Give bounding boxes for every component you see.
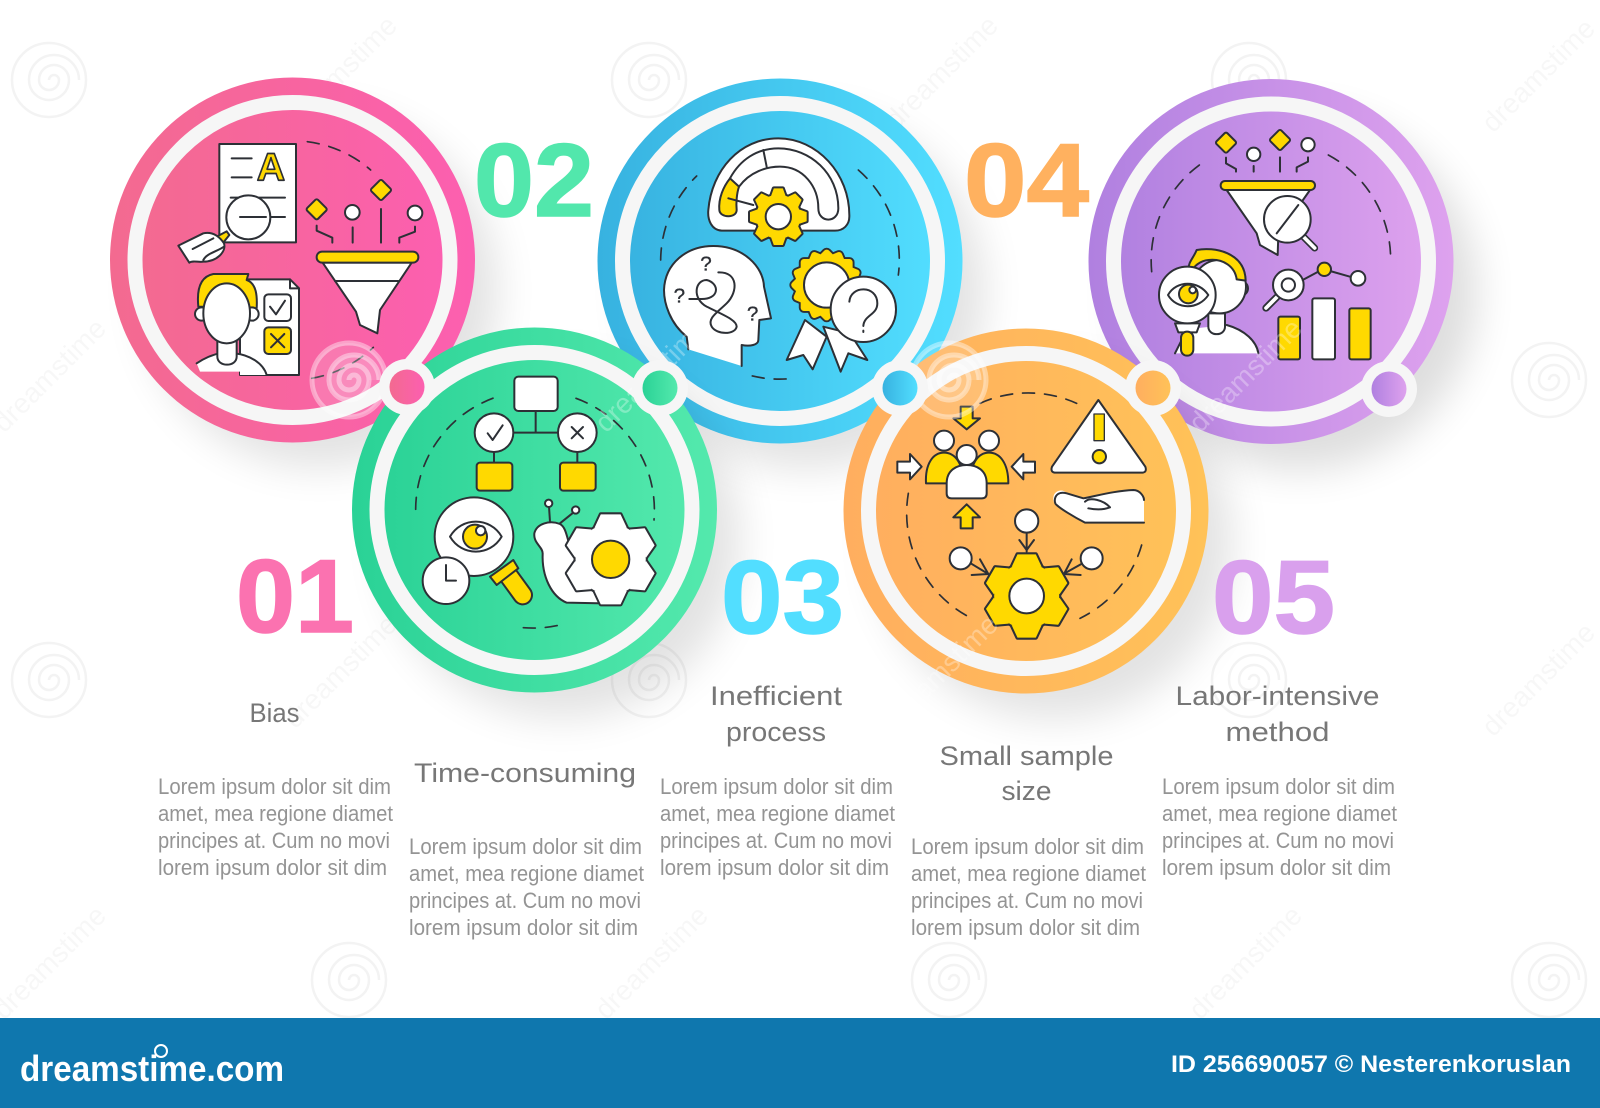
panel: circle 2 green	[352, 328, 740, 718]
text block 5: lorem ipsum dolor sit dim	[1162, 855, 1391, 880]
text block 4: lorem ipsum dolor sit dim	[911, 915, 1140, 940]
text block 3: lorem ipsum dolor sit dim	[660, 855, 889, 880]
icon: gauge, confused head and badge	[661, 138, 899, 379]
text block 4: amet, mea regione diamet	[911, 861, 1146, 886]
text block 3: principes at. Cum no movi	[660, 828, 892, 853]
watermark: diagonal text on circles	[589, 313, 1308, 734]
footer logo: dreamstime.com	[20, 1048, 284, 1089]
number 02: 02	[474, 123, 594, 239]
watermark: diagonal text on circles: dreamstime	[879, 609, 1004, 734]
connector dot 1	[379, 359, 435, 415]
text block 2: amet, mea regione diamet	[409, 861, 644, 886]
text block 4: principes at. Cum no movi	[911, 888, 1143, 913]
heading: Bias: Bias	[250, 698, 300, 728]
text block 5: amet, mea regione diamet	[1162, 801, 1397, 826]
connector dot 5	[1361, 361, 1417, 417]
text block 5: principes at. Cum no movi	[1162, 828, 1394, 853]
text block 1: principes at. Cum no movi	[158, 828, 390, 853]
watermark: diagonal text on white: dreamstime	[1476, 617, 1600, 742]
watermark: diagonal text on white: dreamstime	[1476, 13, 1600, 138]
icon: flowchart, magnifier and snail	[416, 377, 658, 628]
watermark: diagonal text on white: dreamstime	[278, 609, 403, 734]
heading: Labor-intensive method: Labor-intensive	[1176, 681, 1380, 711]
text block 2: Lorem ipsum dolor sit dim	[409, 834, 642, 859]
icon: funnel, person and chart	[1151, 129, 1391, 359]
heading: Labor-intensive method: method	[1226, 717, 1330, 747]
heading: Inefficient process: Inefficient	[710, 681, 843, 711]
panel: circle 5 purple	[1088, 79, 1477, 470]
watermark: diagonal text on white: dreamstime	[589, 900, 714, 1025]
heading: Time-consuming: Time-consuming	[414, 758, 636, 788]
text block 4	[911, 834, 1146, 940]
icon: gauge, confused head and badge: ?	[700, 253, 712, 276]
icon: gauge, confused head and badge: ?	[747, 303, 758, 326]
text block 2	[409, 834, 644, 940]
watermark: diagonal text on white: dreamstime	[879, 10, 1004, 135]
footer credit: ID 256690057 © Nesterenkoruslan	[1171, 1051, 1571, 1078]
number 01: 01	[236, 539, 354, 655]
heading: Small sample size	[940, 741, 1114, 806]
icon: documents, person and funnel	[178, 142, 422, 378]
number 05: 05	[1212, 540, 1335, 656]
text block 2: lorem ipsum dolor sit dim	[409, 915, 638, 940]
heading: Small sample size: Small sample	[940, 741, 1114, 771]
text block 1	[158, 774, 393, 880]
text block 3: amet, mea regione diamet	[660, 801, 895, 826]
panel: circle 3 blue	[598, 78, 985, 469]
number 03: 03	[721, 540, 844, 656]
text block 5: Lorem ipsum dolor sit dim	[1162, 774, 1395, 799]
icon: documents, person and funnel: A	[257, 146, 285, 190]
text block 2: principes at. Cum no movi	[409, 888, 641, 913]
panel: circle 4 orange	[844, 328, 1232, 719]
number 04: 04	[964, 123, 1089, 239]
text block 5	[1162, 774, 1397, 880]
text block 1: lorem ipsum dolor sit dim	[158, 855, 387, 880]
heading: Inefficient process: process	[726, 717, 826, 747]
icon: gauge, confused head and badge: ?	[674, 285, 685, 308]
footer band	[0, 1018, 1600, 1108]
watermark: diagonal text on circles: dreamstime	[589, 313, 714, 438]
heading: Small sample size: size	[1002, 776, 1052, 806]
panel: circle 1 pink	[110, 78, 498, 468]
icon: group, warning, hand and gear	[897, 393, 1146, 638]
text block 1: Lorem ipsum dolor sit dim	[158, 774, 391, 799]
watermark: diagonal text on circles: dreamstime	[1183, 313, 1308, 438]
watermark: diagonal text on white: dreamstime	[278, 10, 403, 135]
text block 3	[660, 774, 895, 880]
text block 3: Lorem ipsum dolor sit dim	[660, 774, 893, 799]
watermark: spirals on circles	[312, 343, 986, 417]
heading: Inefficient process	[710, 681, 843, 747]
text block 1: amet, mea regione diamet	[158, 801, 393, 826]
connector dot 2	[632, 360, 688, 416]
connector dot 3	[872, 360, 928, 416]
heading: Labor-intensive method	[1176, 681, 1380, 747]
connector dot 4	[1125, 360, 1181, 416]
watermark: diagonal text on white: dreamstime	[1183, 900, 1308, 1025]
text block 4: Lorem ipsum dolor sit dim	[911, 834, 1144, 859]
